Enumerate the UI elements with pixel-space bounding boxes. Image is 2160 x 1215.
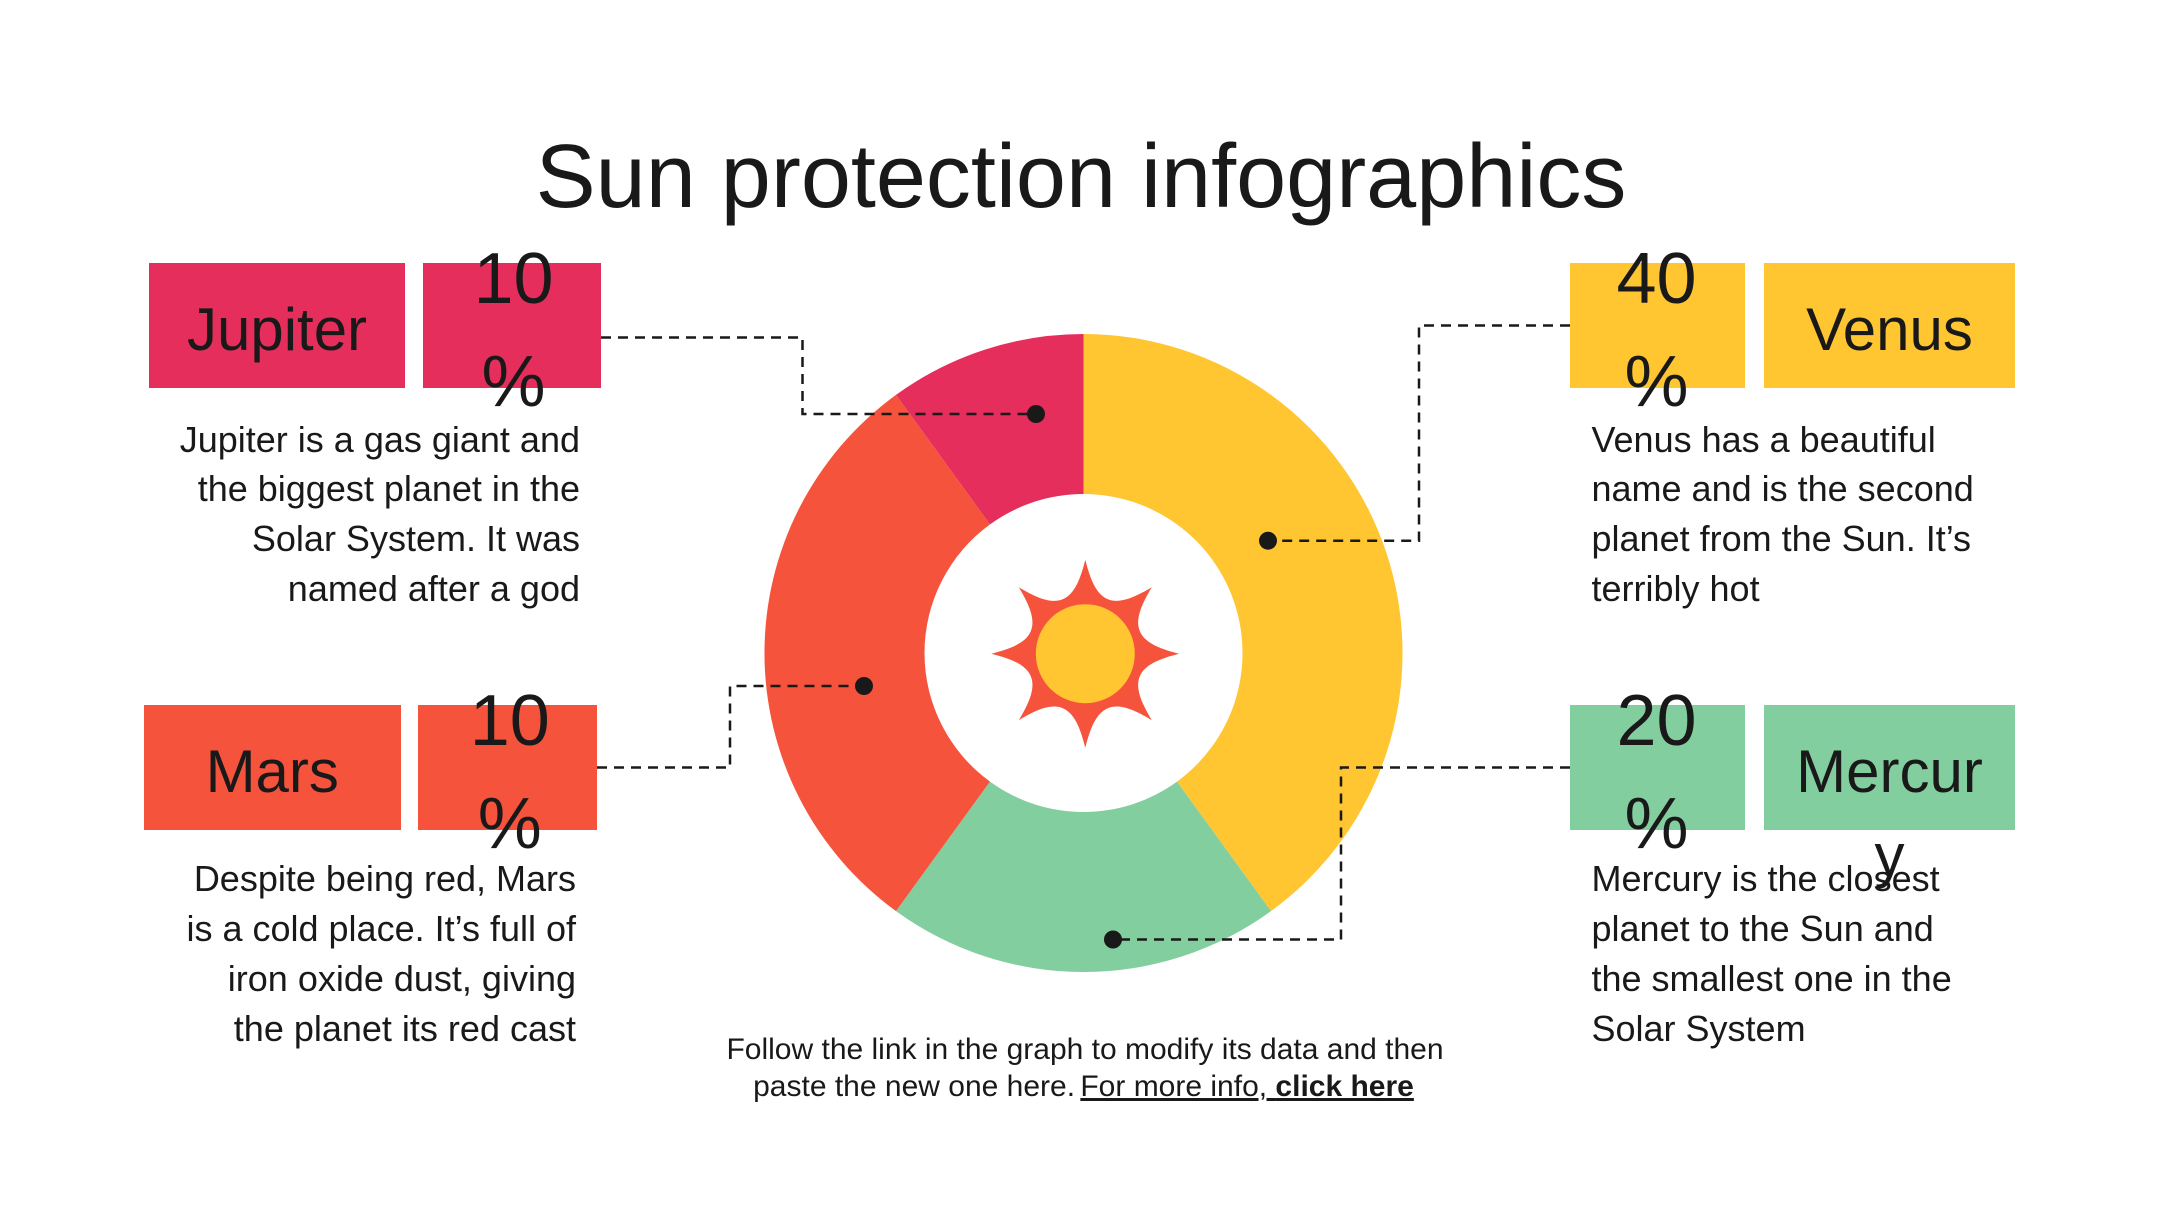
description: Jupiter <box>180 419 580 609</box>
segment: Mercury 20% <box>896 782 1271 972</box>
value box: Mars 10%: % <box>478 784 542 864</box>
value box: Mercury 20%: % <box>1624 784 1689 864</box>
value box: Mercury 20% <box>1570 705 1745 830</box>
description: Mars: Despite being red, Mars <box>194 858 576 899</box>
description: Mars: iron oxide dust, giving <box>228 958 576 999</box>
value box: Jupiter 10%: % <box>481 342 546 422</box>
segment: Mars 30% <box>764 395 990 911</box>
description: Venus: Venus has a beautiful <box>1592 419 1936 460</box>
description: Venus: terribly hot <box>1592 568 1760 609</box>
label: Venus <box>1764 263 2015 388</box>
panel: Mercury: y <box>1874 822 1904 889</box>
label: Jupiter <box>149 263 405 388</box>
segment: Venus 40% <box>1084 334 1403 911</box>
description: Mars: is a cold place. It’s full of <box>186 908 576 949</box>
description: Mercury: Solar System <box>1592 1008 1806 1048</box>
panel: Venus <box>1570 239 2015 609</box>
title: Sun protection infographics <box>536 127 1626 227</box>
description: Jupiter: Jupiter is a gas giant and <box>180 419 580 460</box>
description: Mars: the planet its red cast <box>234 1008 576 1048</box>
label: Mars: Mars <box>206 738 339 805</box>
description: Jupiter: named after a god <box>288 568 580 609</box>
description: Jupiter: Solar System. It was <box>252 518 580 559</box>
panel: Mercury <box>1570 681 2015 1048</box>
description: Venus: name and is the second <box>1592 468 1974 509</box>
segment: Jupiter 10% <box>896 334 1084 524</box>
description: Mercury: Mercury is the closest <box>1592 858 1940 899</box>
panel: Jupiter <box>149 239 601 609</box>
panel: Mars <box>144 681 597 1048</box>
label: Jupiter: Jupiter <box>187 296 367 363</box>
label: Mars <box>144 705 401 830</box>
description: Venus: planet from the Sun. It’s <box>1592 518 1971 559</box>
footer note <box>726 1033 1444 1103</box>
value box: Venus 40%: 40 <box>1616 239 1697 319</box>
label: Mercury: Mercur <box>1796 738 1983 805</box>
label: Venus: Venus <box>1806 296 1973 363</box>
value box: Venus 40%: % <box>1624 342 1689 422</box>
footer note: Follow the link in the graph to modify its data and then <box>726 1033 1444 1066</box>
value box: Mercury 20%: 20 <box>1616 681 1697 761</box>
description: Mars <box>186 858 576 1048</box>
value box: Mars 10%: 10 <box>470 681 550 761</box>
icon: sun <box>991 560 1179 748</box>
value box: Jupiter 10%: 10 <box>473 239 554 319</box>
description: Mercury: planet to the Sun and <box>1592 908 1934 949</box>
description: Mercury <box>1592 858 1952 1048</box>
value box: Venus 40% <box>1570 263 1745 388</box>
value box: Jupiter 10% <box>423 263 601 388</box>
description: Venus <box>1592 419 1974 609</box>
footer note: paste the new one here. For more info, click here <box>753 1070 1414 1103</box>
label: Mercury <box>1764 705 2015 830</box>
value box: Mars 10% <box>418 705 597 830</box>
description: Mercury: the smallest one in the <box>1592 958 1952 999</box>
description: Jupiter: the biggest planet in the <box>198 468 580 509</box>
